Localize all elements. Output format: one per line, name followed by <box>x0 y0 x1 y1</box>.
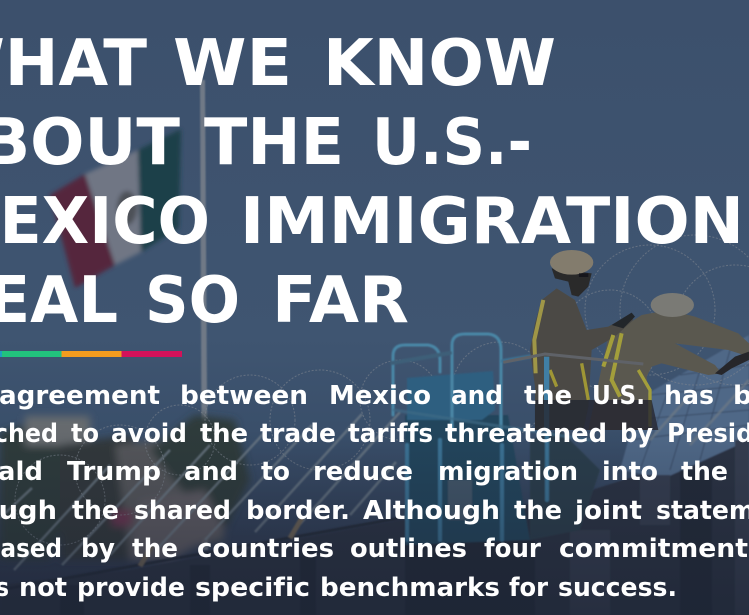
paragraph line 5: outlines <box>350 534 467 564</box>
paragraph line 4: the <box>514 496 562 526</box>
paragraph line 3: into <box>602 457 658 487</box>
flagpole <box>200 80 208 550</box>
title line 3 <box>0 185 744 259</box>
paragraph line 5 <box>0 534 749 564</box>
paragraph line 1: has <box>664 381 714 411</box>
darkening at the bottom <box>0 430 749 615</box>
title line 1: KNOW <box>323 27 556 101</box>
Mexican flag <box>50 129 181 288</box>
soldier on the left <box>530 288 633 430</box>
title line 4: SO <box>145 264 240 338</box>
paragraph line 1: the <box>524 381 572 411</box>
paragraph line 1: Mexico <box>329 381 431 411</box>
title line 4 <box>0 264 409 338</box>
paragraph line 3: migration <box>438 457 578 487</box>
paragraph line 2: by <box>620 419 653 449</box>
paragraph line 1: agreement <box>0 381 160 411</box>
aerial lift basket <box>392 334 600 545</box>
paragraph line 6: success. <box>558 573 677 603</box>
razor wire coils <box>15 235 749 545</box>
paragraph line 3: reduce <box>313 457 413 487</box>
title line 4: FAR <box>272 264 409 338</box>
paragraph line 5: four <box>484 534 541 564</box>
paragraph line 2: threatened <box>445 419 607 449</box>
paragraph line 5: by <box>81 534 115 564</box>
hillside buildings and trees <box>0 415 250 560</box>
paragraph line 4: joint <box>574 496 642 526</box>
paragraph line 3: and <box>184 457 238 487</box>
intro paragraph <box>0 381 749 603</box>
paragraph line 1: U.S. <box>592 381 645 411</box>
paragraph line 6: not <box>19 573 67 603</box>
title line 1: WE <box>173 27 292 101</box>
paragraph line 3: Trump <box>67 457 161 487</box>
paragraph line 6: specific <box>195 573 310 603</box>
paragraph line 4 <box>0 496 749 526</box>
colour accent bar <box>0 351 182 357</box>
paragraph line 4: border. <box>246 496 350 526</box>
paragraph line 2: to <box>71 419 99 449</box>
paragraph line 3: the <box>681 457 728 487</box>
paragraph line 1: and <box>451 381 503 411</box>
paragraph line 6: benchmarks <box>320 573 500 603</box>
paragraph line 2: avoid <box>111 419 187 449</box>
paragraph line 5: the <box>132 534 178 564</box>
title line 3: IMMIGRATION <box>240 185 744 259</box>
paragraph line 4: Although <box>363 496 500 526</box>
paragraph line 4: the <box>72 496 119 526</box>
fence lower body <box>0 335 749 615</box>
paragraph line 1 <box>0 381 749 411</box>
soldier on the right <box>588 310 749 430</box>
paragraph line 2 <box>0 419 749 449</box>
title line 2: U.S.- <box>372 106 532 180</box>
paragraph line 5: countries <box>197 534 334 564</box>
paragraph line 3 <box>0 457 749 487</box>
paragraph line 2: trade <box>260 419 336 449</box>
title line 1 <box>0 27 556 101</box>
title line 2: THE <box>204 106 344 180</box>
paragraph line 6: for <box>509 573 548 603</box>
paragraph line 2: the <box>200 419 248 449</box>
title <box>0 27 744 338</box>
paragraph line 1: between <box>180 381 308 411</box>
soldiers <box>503 250 749 430</box>
paragraph line 4: shared <box>134 496 231 526</box>
paragraph line 3: to <box>261 457 290 487</box>
title line 2 <box>0 106 532 180</box>
paragraph line 2: tariffs <box>348 419 433 449</box>
paragraph line 6: provide <box>77 573 185 603</box>
paragraph line 6 <box>0 573 677 603</box>
